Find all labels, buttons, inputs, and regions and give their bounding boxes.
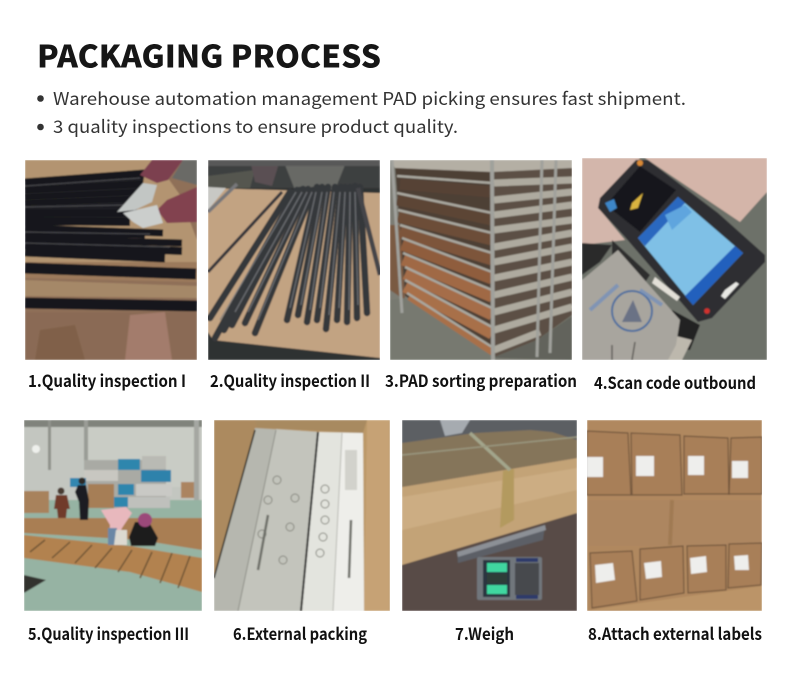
scale display bbox=[477, 557, 542, 600]
caption 1: 1.Quality inspection I bbox=[28, 368, 186, 392]
caption 5: 5.Quality inspection III bbox=[28, 621, 189, 645]
scanner buttons bbox=[721, 282, 739, 299]
right shelf side bbox=[494, 180, 572, 350]
caption 2: 2.Quality inspection II bbox=[210, 368, 370, 392]
photo 1: inspecting black tubes on wood bbox=[25, 160, 197, 360]
scale platform bbox=[457, 525, 545, 563]
rack posts bbox=[392, 160, 556, 360]
photo 8: stacked cartons with labels bbox=[587, 420, 762, 611]
caption 7: 7.Weigh bbox=[455, 621, 514, 645]
photo 3: metal shelving racks with trays bbox=[390, 160, 572, 360]
stacked crates bbox=[84, 460, 166, 508]
device body bbox=[598, 160, 765, 322]
caption 4: 4.Scan code outbound bbox=[594, 370, 756, 394]
bullet list: Warehouse automation management PAD picking ensures fast shipment. bbox=[53, 86, 686, 111]
gloved hand bbox=[582, 250, 680, 360]
keypad bbox=[606, 166, 676, 232]
left shelf boards bbox=[397, 184, 492, 353]
bullet list bbox=[37, 86, 686, 139]
box rows bbox=[24, 518, 202, 550]
workers bbox=[54, 495, 70, 518]
photo 5: warehouse workers inspecting boxes bbox=[24, 420, 202, 611]
photo 6: open carton with white product boxes bbox=[214, 420, 390, 611]
caption 8: 8.Attach external labels bbox=[588, 621, 762, 645]
photo 4: handheld PDA scanner bbox=[582, 158, 767, 360]
title: PACKAGING PROCESS bbox=[37, 32, 381, 76]
screen bbox=[638, 197, 743, 305]
photo 7: carton on weighing scale bbox=[402, 420, 577, 611]
photo 2: rows of black tubes on wood board bbox=[208, 160, 380, 360]
caption 6: 6.External packing bbox=[233, 621, 367, 645]
bullet list: 3 quality inspections to ensure product quality. bbox=[53, 114, 458, 139]
carton labels bbox=[587, 456, 749, 583]
caption 3: 3.PAD sorting preparation bbox=[385, 368, 577, 392]
